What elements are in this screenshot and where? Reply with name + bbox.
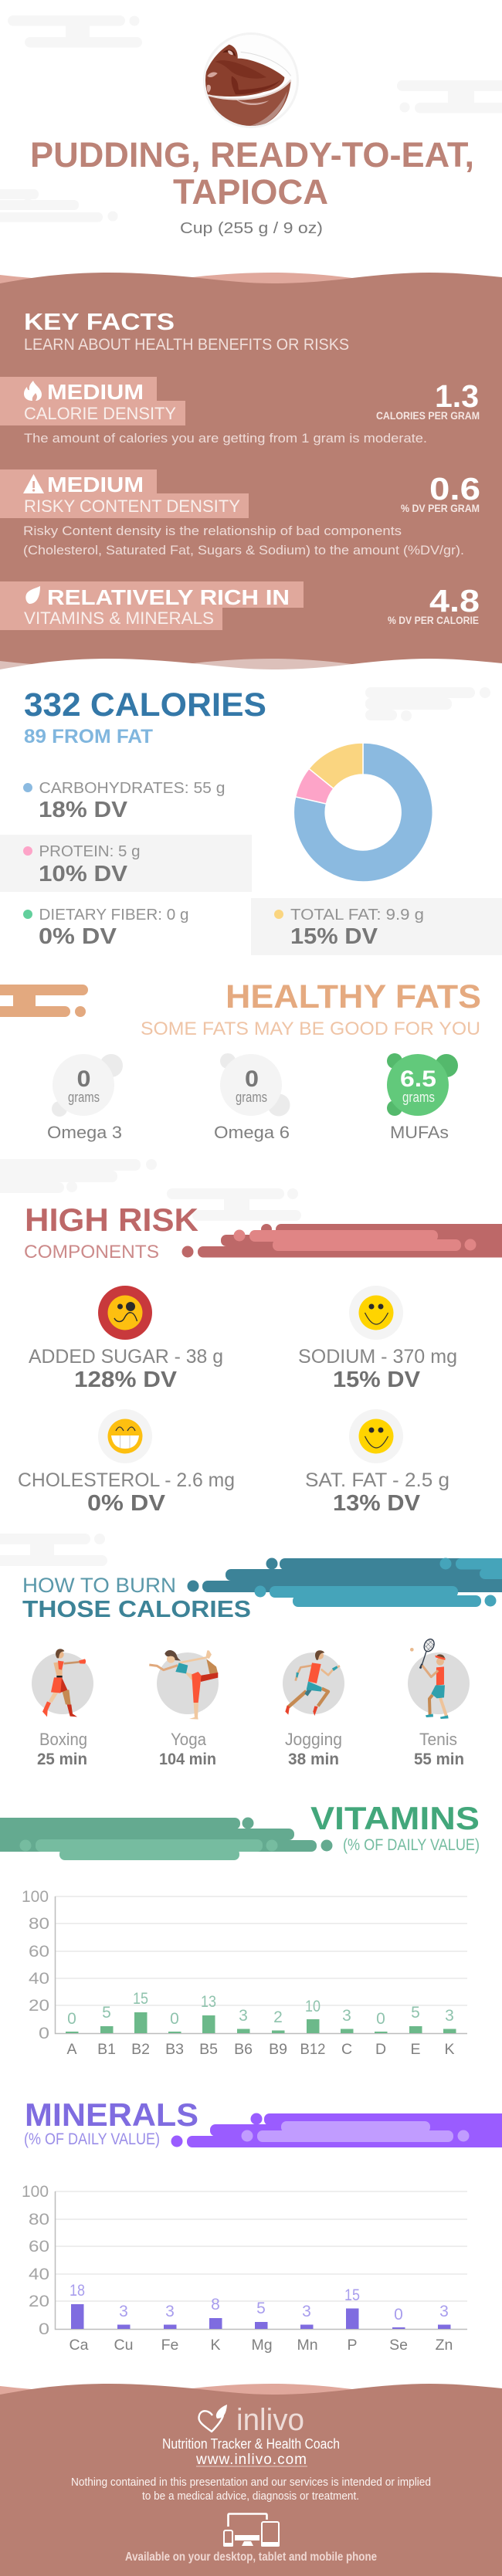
- bar chart: minerals: 3: [439, 2303, 449, 2320]
- disclaimer: [71, 2476, 431, 2503]
- item: added sugar: ADDED SUGAR - 38 g: [29, 1346, 223, 1368]
- legend: dietary fiber: DIETARY FIBER: 0 g: [39, 907, 188, 924]
- stat: mufas: 6.5: [400, 1066, 436, 1092]
- bar chart: vitamins: D: [375, 2041, 386, 2058]
- icon: devices: [223, 2514, 280, 2547]
- stat: omega 6: 0: [245, 1066, 259, 1092]
- activity: boxing: [32, 1649, 93, 1768]
- panel: vitamins: [0, 1800, 480, 2058]
- disclaimer: Nothing contained in this presentation and our services is intended or implied: [71, 2476, 431, 2489]
- bar chart: vitamins: 0: [376, 2010, 385, 2028]
- panel: high risk components: [18, 1202, 502, 1516]
- banner: orange cloud: [0, 985, 88, 1017]
- bar chart: minerals: P: [347, 2337, 358, 2354]
- activity: yoga: 104 min: [159, 1751, 216, 1768]
- fact: vitamins and minerals: [0, 581, 480, 630]
- bar chart: vitamins: 60: [29, 1943, 49, 1961]
- item: sodium: [298, 1286, 457, 1392]
- bar chart: vitamins: B5: [199, 2041, 218, 2058]
- bar chart: minerals: 40: [29, 2266, 49, 2283]
- legend: dietary fiber: 0% DV: [39, 924, 117, 949]
- panel: healthy fats: [0, 978, 481, 1142]
- stat: omega 3: 0: [77, 1066, 91, 1092]
- legend: carbohydrates: CARBOHYDRATES: 55 g: [39, 780, 226, 797]
- logo: inlivo: inlivo: [236, 2403, 304, 2437]
- activity: tennis: [408, 1638, 470, 1768]
- bar chart: vitamins: 15: [133, 1990, 148, 2008]
- bar chart: vitamins: C: [341, 2041, 352, 2058]
- legend: total fat: [274, 907, 424, 949]
- legend: total fat: 15% DV: [290, 924, 378, 949]
- fact: calorie density: CALORIES PER GRAM: [376, 410, 480, 422]
- activity: jogging: 38 min: [288, 1751, 339, 1768]
- activity: jogging: Jogging: [285, 1730, 342, 1749]
- bar chart: minerals: Zn: [436, 2337, 453, 2354]
- bar chart: vitamins: 0: [67, 2010, 76, 2028]
- bar chart: minerals: 0: [39, 2320, 49, 2338]
- item: saturated fat: SAT. FAT - 2.5 g: [305, 1469, 449, 1491]
- legend: carbohydrates: 18% DV: [39, 798, 128, 822]
- bar chart: minerals: Se: [389, 2337, 408, 2354]
- stat: omega 6: [214, 1053, 290, 1142]
- legend: total fat: TOTAL FAT: 9.9 g: [290, 907, 424, 924]
- bar chart: vitamins: 80: [29, 1915, 49, 1933]
- item: added sugar: 128% DV: [74, 1368, 178, 1392]
- fact: risky content density: Risky Content density is the relationship of bad components: [23, 524, 402, 538]
- legend: carbohydrates: [23, 780, 226, 822]
- bar chart: vitamins: A: [66, 2041, 77, 2058]
- bar chart: minerals: K: [210, 2337, 221, 2354]
- bar chart: minerals: Ca: [70, 2337, 89, 2354]
- bar chart: minerals: 3: [302, 2303, 311, 2320]
- bar chart: vitamins: B3: [165, 2041, 184, 2058]
- bar chart: vitamins: 13: [201, 1993, 216, 2011]
- bar chart: minerals: 8: [211, 2296, 220, 2313]
- fact: calorie density: 1.3: [435, 378, 479, 414]
- bar chart: vitamins: B6: [234, 2041, 253, 2058]
- heading: healthy fats: HEALTHY FATS: [226, 978, 481, 1015]
- serving size: Cup (255 g / 9 oz): [180, 220, 323, 237]
- bar chart: vitamins: B12: [300, 2041, 326, 2058]
- legend row backgrounds: [0, 835, 502, 955]
- bar chart: minerals: 80: [29, 2211, 49, 2229]
- bar chart: vitamins: B2: [131, 2041, 150, 2058]
- fact: vitamins and minerals: VITAMINS & MINERALS: [24, 608, 214, 628]
- fact: risky content density: MEDIUM: [47, 473, 144, 497]
- legend: protein: 10% DV: [39, 862, 128, 886]
- fact: vitamins and minerals: 4.8: [429, 583, 480, 619]
- activity: tennis: 55 min: [414, 1751, 464, 1768]
- donut chart: calorie breakdown: [293, 743, 432, 882]
- subheading: key facts: LEARN ABOUT HEALTH BENEFITS OR RISKS: [24, 336, 349, 354]
- fact: calorie density: MEDIUM: [47, 380, 144, 404]
- legend: dietary fiber: [23, 907, 188, 949]
- bar chart: minerals: Mn: [297, 2337, 318, 2354]
- bar chart: vitamins: 0: [39, 2025, 49, 2042]
- item: added sugar: [29, 1286, 223, 1392]
- fact: vitamins and minerals: RELATIVELY RICH IN: [47, 585, 290, 609]
- bar chart: vitamins: [22, 1888, 467, 2058]
- legend: protein: PROTEIN: 5 g: [39, 843, 141, 860]
- activity: yoga: Yoga: [171, 1730, 207, 1749]
- stat: omega 6: Omega 6: [214, 1123, 290, 1142]
- bar chart: minerals: [22, 2183, 467, 2354]
- subheading: calories from fat: 89 FROM FAT: [24, 726, 153, 747]
- banner: green cloud: [0, 1818, 332, 1860]
- item: cholesterol: 0% DV: [87, 1491, 166, 1516]
- heading: calories: 332 CALORIES: [24, 686, 266, 724]
- disclaimer: to be a medical advice, diagnosis or treatment.: [142, 2490, 359, 2503]
- availability note: Available on your desktop, tablet and mobile phone: [125, 2551, 377, 2564]
- bar chart: vitamins: 3: [445, 2007, 454, 2025]
- subheading: components: COMPONENTS: [24, 1242, 159, 1263]
- fact: vitamins and minerals: % DV PER CALORIE: [388, 615, 479, 626]
- bar chart: vitamins: 2: [273, 2008, 283, 2026]
- heading: minerals: MINERALS: [25, 2096, 198, 2133]
- bar chart: vitamins: B9: [269, 2041, 287, 2058]
- bar chart: vitamins: E: [410, 2041, 421, 2058]
- bar chart: minerals: 18: [70, 2282, 85, 2300]
- bar chart: vitamins: 40: [29, 1970, 49, 1988]
- bar chart: minerals: 100: [22, 2183, 49, 2201]
- stat: mufas: grams: [402, 1090, 435, 1105]
- activity: tennis: Tenis: [419, 1730, 457, 1749]
- bar chart: vitamins: 3: [342, 2007, 351, 2025]
- stat: omega 3: Omega 3: [47, 1123, 122, 1142]
- banner: red cloud: [182, 1224, 502, 1257]
- fact: risky content density: % DV PER GRAM: [401, 503, 480, 514]
- banner: teal cloud: [187, 1558, 502, 1607]
- activity: yoga: [149, 1650, 219, 1768]
- subheading: percent of daily value: (% OF DAILY VALUE): [24, 2130, 160, 2148]
- bar chart: vitamins: 100: [22, 1888, 49, 1906]
- bar chart: vitamins: 5: [102, 2004, 111, 2022]
- item: sodium: SODIUM - 370 mg: [298, 1346, 457, 1368]
- bar chart: vitamins: 3: [239, 2007, 248, 2025]
- logo: inlivo: [198, 2403, 304, 2437]
- bar chart: vitamins: 10: [305, 1998, 321, 2015]
- heading: vitamins: VITAMINS: [310, 1800, 480, 1836]
- fact: calorie density: The amount of calories you are getting from 1 gram is moderate.: [24, 431, 427, 446]
- subheading: percent of daily value: (% OF DAILY VALUE): [343, 1836, 480, 1854]
- bar chart: vitamins: K: [444, 2041, 455, 2058]
- stat: omega 3: grams: [68, 1090, 100, 1105]
- panel: footer: [0, 2384, 502, 2576]
- fact: calorie density: CALORIE DENSITY: [24, 404, 176, 423]
- title: TAPIOCA: [173, 172, 328, 212]
- bar chart: minerals: Fe: [161, 2337, 178, 2354]
- stat: mufas: [387, 1053, 458, 1142]
- item: saturated fat: [305, 1409, 449, 1516]
- bar chart: minerals: 20: [29, 2293, 49, 2310]
- tagline: Nutrition Tracker & Health Coach: [162, 2435, 340, 2452]
- fact: calorie density: [0, 377, 480, 446]
- bar chart: vitamins: 20: [29, 1997, 49, 2015]
- activity: jogging: [283, 1650, 344, 1768]
- heading: key facts: KEY FACTS: [24, 308, 175, 335]
- item: cholesterol: [18, 1409, 235, 1516]
- item: sodium: 15% DV: [333, 1368, 421, 1392]
- item: cholesterol: CHOLESTEROL - 2.6 mg: [18, 1469, 235, 1491]
- panel: calories: [0, 686, 502, 955]
- item: saturated fat: 13% DV: [333, 1491, 421, 1516]
- website link: www.inlivo.com: [195, 2452, 307, 2468]
- bar chart: minerals: 3: [165, 2303, 175, 2320]
- bar chart: minerals: 15: [344, 2286, 360, 2304]
- fact: risky content density: RISKY CONTENT DENSITY: [24, 497, 240, 516]
- stat: omega 6: grams: [236, 1090, 267, 1105]
- bar chart: minerals: Mg: [251, 2337, 273, 2354]
- heading: how to burn: HOW TO BURN: [22, 1574, 176, 1597]
- bar chart: minerals: Cu: [114, 2337, 133, 2354]
- legend: protein: [23, 843, 141, 886]
- activity: boxing: 25 min: [37, 1751, 87, 1768]
- bar chart: minerals: 5: [256, 2300, 266, 2317]
- bar chart: vitamins: B1: [97, 2041, 116, 2058]
- panel: minerals: [22, 2096, 502, 2354]
- bar chart: vitamins: 5: [411, 2004, 420, 2022]
- bar chart: minerals: 0: [394, 2306, 403, 2323]
- bar chart: minerals: 3: [119, 2303, 128, 2320]
- banner: purple cloud: [171, 2113, 502, 2147]
- title: PUDDING, READY-TO-EAT,: [30, 135, 474, 175]
- stat: mufas: MUFAs: [390, 1123, 449, 1142]
- panel: key facts: [0, 273, 502, 676]
- bar chart: minerals: 60: [29, 2238, 49, 2256]
- fact: risky content density: [0, 469, 480, 558]
- panel: how to burn those calories: [22, 1558, 502, 1768]
- food photo: pudding in a glass bowl: [203, 32, 299, 128]
- title: [30, 135, 474, 212]
- heading: high risk: HIGH RISK: [25, 1202, 198, 1238]
- fact: risky content density: (Cholesterol, Saturated Fat, Sugars & Sodium) to the amount (%DV/gr).: [23, 543, 464, 558]
- stat: omega 3: [47, 1054, 123, 1142]
- activity: boxing: Boxing: [39, 1730, 87, 1749]
- fact: risky content density: 0.6: [429, 471, 480, 507]
- heading: those calories: THOSE CALORIES: [22, 1595, 251, 1622]
- subheading: healthy fats: SOME FATS MAY BE GOOD FOR YOU: [141, 1019, 480, 1039]
- bar chart: vitamins: 0: [170, 2010, 179, 2028]
